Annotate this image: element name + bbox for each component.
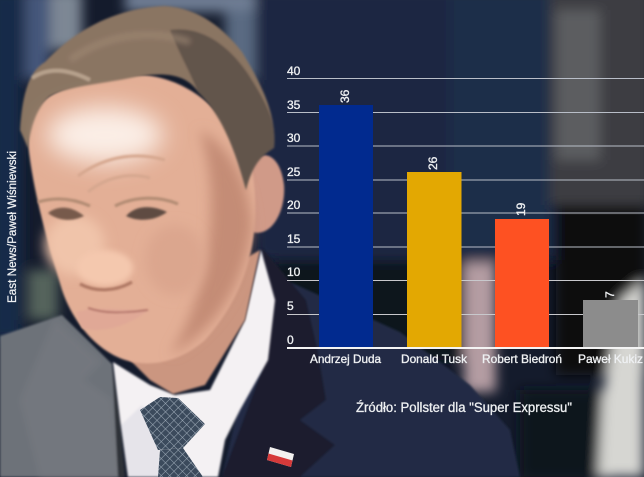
y axis labels: 40 <box>287 64 301 78</box>
bar: Robert Biedroń 19 <box>495 202 549 347</box>
category labels: Donald Tusk <box>401 352 468 366</box>
nose shadow <box>80 282 132 290</box>
white shirt and collar <box>113 250 275 477</box>
nose <box>77 250 133 286</box>
bar: Donald Tusk 26 <box>407 156 462 347</box>
y axis labels: 5 <box>287 299 294 313</box>
eyes <box>38 198 178 220</box>
dark jacket <box>222 248 520 477</box>
grid lines <box>287 78 644 315</box>
photo credit: East News/Paweł Wiśniewski <box>7 151 19 303</box>
face <box>27 75 255 363</box>
y axis labels: 35 <box>287 98 301 112</box>
y axis labels: 0 <box>287 333 294 347</box>
y axis labels: 25 <box>287 165 301 179</box>
category labels: Paweł Kukiz <box>578 352 643 366</box>
forehead highlight <box>47 107 163 163</box>
bar: Andrzej Duda 36: 36 <box>338 89 352 103</box>
bar: Andrzej Duda 36 <box>319 89 373 347</box>
category labels <box>310 352 643 366</box>
y axis labels: 15 <box>287 232 301 246</box>
category labels: Robert Biedroń <box>482 352 562 366</box>
bar: Donald Tusk 26: 26 <box>426 156 440 170</box>
bar: Paweł Kukiz 7: 7 <box>603 291 617 298</box>
category labels: Andrzej Duda <box>310 352 381 366</box>
left cheek highlight <box>45 215 105 275</box>
hair <box>20 6 274 190</box>
right cheek <box>152 234 196 286</box>
bar: Paweł Kukiz 7 <box>583 291 638 347</box>
y axis labels <box>287 64 301 347</box>
y axis labels: 30 <box>287 131 301 145</box>
baseline <box>287 347 644 349</box>
brow wrinkles <box>78 156 165 192</box>
ear <box>250 155 284 233</box>
portrait illustration <box>0 6 520 477</box>
face shading <box>170 130 252 355</box>
y axis labels: 10 <box>287 265 301 279</box>
grey jacket <box>0 315 125 477</box>
bar chart <box>287 64 644 366</box>
patterned tie <box>140 397 205 477</box>
y axis labels: 20 <box>287 198 301 212</box>
neck <box>115 250 260 394</box>
flag pin <box>267 447 294 467</box>
mouth <box>76 308 148 330</box>
source note: Źródło: Pollster dla "Super Expressu" <box>356 400 572 415</box>
bar: Robert Biedroń 19: 19 <box>514 202 528 216</box>
